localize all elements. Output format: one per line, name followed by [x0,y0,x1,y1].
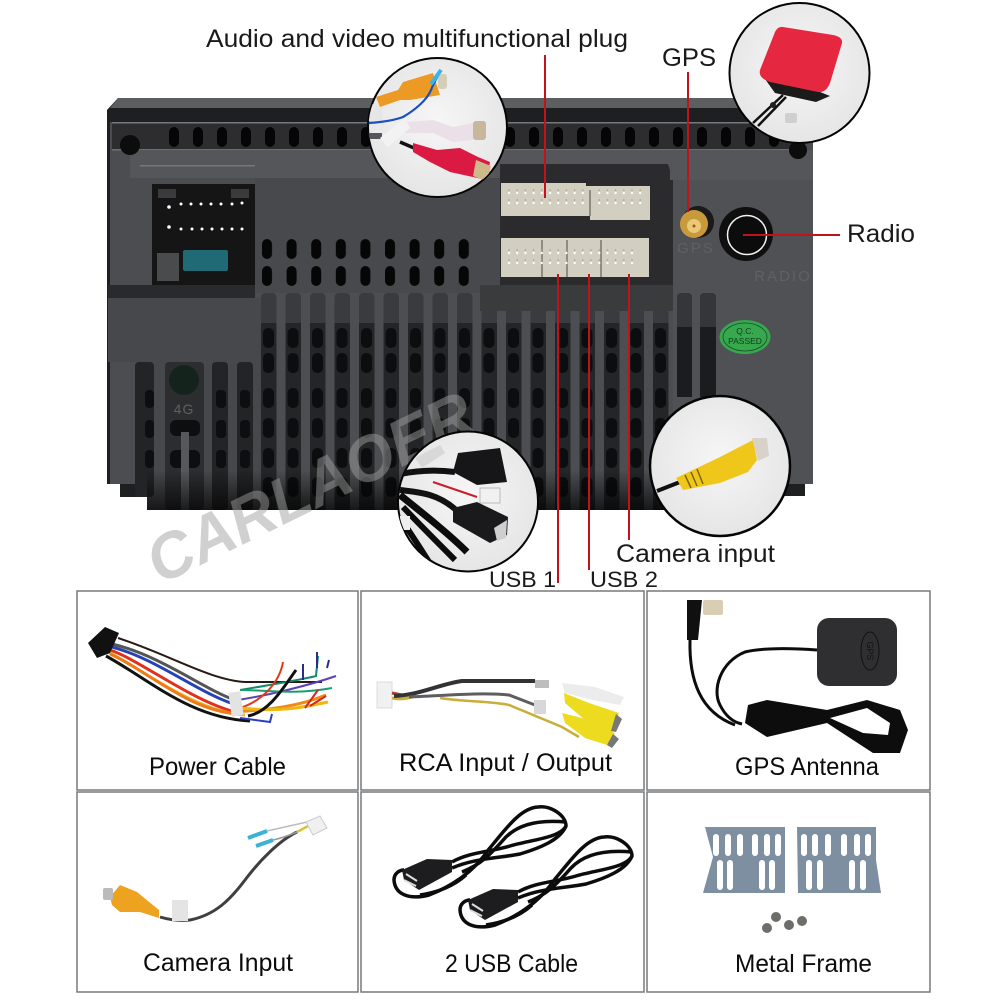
QC passed sticker: Q.C. [736,326,754,336]
upper connector block [501,183,650,220]
radio socket: RADIO [754,268,812,285]
panel: RCA input output [361,591,644,790]
rib and hole vents [261,293,669,510]
right panel [673,178,813,484]
connector panel [480,164,673,311]
radio socket [719,207,812,285]
icon: screws [762,912,807,933]
chassis face [110,122,813,484]
panel: metal frame [647,792,930,992]
icon: USB cable one [394,807,566,897]
top vent slots [169,126,779,150]
label: GPS: GPS [662,44,716,72]
power connector [152,184,255,286]
GPS SMA connector: GPS [677,240,715,257]
QC passed sticker [720,320,770,354]
icon: GPS puck and cable [687,600,908,753]
label: audio and video plug: Audio and video multifunctional plug [206,25,628,53]
label: Camera Input [143,949,293,977]
icon: GPS puck and cable: GPS [865,641,875,661]
callout: USB cables [398,432,538,572]
icon: right bracket [797,827,881,893]
GPS SMA connector [677,206,715,257]
callout labels [206,25,915,592]
label: radio: Radio [847,220,915,248]
label: Metal Frame [735,950,872,978]
callout leader lines [545,55,840,583]
icon: camera cable [103,816,327,921]
panel: power cable [77,591,358,790]
4G port [169,365,199,395]
radio rear chassis [107,98,813,510]
lower connector block [501,238,649,277]
chassis shell [107,98,813,510]
label: RCA Input / Output [399,749,612,777]
QC passed sticker: PASSED [728,336,762,346]
label: USB 2: USB 2 [590,567,658,592]
label: USB 1: USB 1 [489,567,556,592]
icon: RCA cable [377,680,624,748]
label: Power Cable [149,753,286,781]
watermark: CARLAOER [135,377,485,598]
callout: RCA plugs [368,58,507,197]
left lower vents [135,362,261,510]
icon: USB cable two [460,837,632,927]
label: camera input: Camera input [616,540,775,568]
corner screw [789,141,807,159]
middle vent slots [262,239,477,289]
left lower vents: 4G [174,401,194,417]
fuse [183,250,228,271]
label: 2 USB Cable [445,950,578,978]
panel: GPS antenna [647,591,930,790]
centre panel [255,178,500,293]
left lower panel [108,285,255,298]
icon: left bracket [703,827,785,893]
panel: camera input [77,792,358,992]
panel: 2 USB cable [361,792,644,992]
callout: GPS antenna [730,3,870,143]
callout: camera plug [650,396,790,536]
right upper ribs [677,293,716,397]
label: GPS Antenna [735,753,879,781]
icon: wiring harness [106,638,336,722]
mounting screw [120,135,140,155]
